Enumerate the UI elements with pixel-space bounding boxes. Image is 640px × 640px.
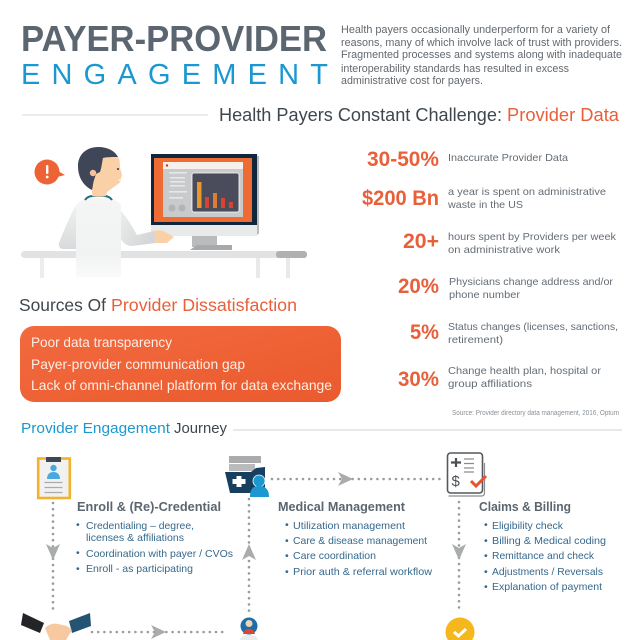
- panel: dissatisfaction reasons: Payer-provider communication gap: [31, 356, 245, 372]
- stat: 30%: [398, 365, 602, 391]
- stat: 30-50%: 30-50%: [367, 148, 439, 171]
- stat: 20%: phone number: [449, 289, 521, 301]
- panel: medical management: Care & disease management: [293, 535, 427, 547]
- heading: provider engagement journey: Journey: [174, 420, 227, 437]
- stat: 30%: Change health plan, hospital or: [448, 365, 602, 377]
- heading: provider data challenge: [22, 105, 620, 125]
- journey flow arrows: [46, 472, 466, 639]
- icon: alert speech bubble: [34, 160, 65, 184]
- icon: medical folder with patient: [225, 456, 269, 497]
- panel: claims and billing: Eligibility check: [492, 520, 564, 532]
- panel: claims and billing: •: [484, 550, 488, 562]
- icon: claims document: [448, 453, 486, 496]
- stat: 20+: on administrative work: [448, 244, 561, 256]
- panel: medical management: Care coordination: [293, 550, 376, 562]
- desk: [21, 251, 307, 278]
- panel: enroll and re-credential: licenses & affiliations: [86, 532, 184, 544]
- stat: $200 Bn: $200 Bn: [362, 187, 439, 210]
- stat: 30%: group affiliations: [448, 378, 532, 390]
- intro text block: reasons, many of which involve lack of trust with providers.: [341, 37, 622, 49]
- intro text block: administrative cost for payers.: [341, 75, 483, 87]
- title: ENGAGEMENT: [21, 59, 328, 91]
- intro text block: [341, 24, 622, 87]
- panel: claims and billing: Remittance and check: [492, 550, 595, 562]
- panel: medical management: Prior auth & referral workflow: [293, 566, 432, 578]
- title: [21, 18, 328, 91]
- stat: 5%: 5%: [410, 321, 439, 344]
- panel: enroll and re-credential: [76, 499, 233, 575]
- panel: dissatisfaction reasons: [20, 326, 341, 402]
- icon: clipboard credential: [38, 457, 70, 498]
- panel: enroll and re-credential: •: [76, 563, 80, 575]
- stat: 20+: hours spent by Providers per week: [448, 231, 617, 243]
- icon: provider avatar: [240, 618, 258, 640]
- source note: Source: Provider directory data management, 2016, Optum: [452, 410, 619, 417]
- stat: 5%: retirement): [448, 334, 503, 346]
- stat: 30%: 30%: [398, 368, 439, 391]
- panel: enroll and re-credential: Coordination with payer / CVOs: [86, 548, 233, 560]
- intro text block: Fragmented processes and systems along with inadequate: [341, 49, 622, 61]
- panel: medical management: •: [285, 519, 289, 531]
- stat: $200 Bn: a year is spent on administrative: [448, 186, 606, 198]
- intro text block: interoperability standards has resulted in excess: [341, 63, 569, 75]
- panel: dissatisfaction reasons: Poor data transparency: [31, 334, 172, 350]
- stat: $200 Bn: waste in the US: [447, 199, 523, 211]
- panel: enroll and re-credential: Credentialing – degree,: [86, 520, 194, 532]
- heading: sources of dissatisfaction: Provider Dissatisfaction: [111, 295, 297, 315]
- panel: claims and billing: Billing & Medical coding: [492, 535, 606, 547]
- icon: handshake: [21, 613, 91, 640]
- computer monitor: [151, 154, 259, 250]
- heading: provider engagement journey: [21, 420, 622, 437]
- stat: 20+: [403, 230, 617, 256]
- panel: claims and billing: Explanation of payment: [492, 581, 602, 593]
- panel: claims and billing: •: [484, 566, 488, 578]
- stat: 30-50%: [367, 148, 568, 171]
- stat: 20%: 20%: [398, 275, 439, 298]
- stat: 20%: [398, 275, 614, 301]
- panel: medical management: Utilization management: [293, 520, 405, 532]
- panel: enroll and re-credential: •: [76, 547, 80, 559]
- stat: 5%: Status changes (licenses, sanctions,: [448, 321, 618, 333]
- intro text block: Health payers occasionally underperform for a variety of: [341, 24, 611, 36]
- title: PAYER-PROVIDER: [21, 18, 327, 59]
- panel: medical management: Medical Management: [278, 499, 406, 514]
- stat: 30-50%: Inaccurate Provider Data: [448, 152, 568, 164]
- doctor: [59, 147, 174, 277]
- panel: medical management: •: [285, 550, 289, 562]
- icon: approval badge: [446, 618, 474, 640]
- panel: medical management: [278, 499, 432, 578]
- stat: $200 Bn: [362, 186, 606, 211]
- panel: enroll and re-credential: Enroll - as participating: [86, 563, 193, 575]
- panel: medical management: •: [285, 566, 289, 578]
- panel: enroll and re-credential: Enroll & (Re)-Credential: [77, 499, 221, 514]
- panel: claims and billing: Adjustments / Reversals: [492, 566, 603, 578]
- illustration: doctor at computer: [21, 147, 307, 278]
- panel: claims and billing: •: [484, 535, 488, 547]
- heading: provider engagement journey: Provider Engagement: [21, 420, 171, 437]
- icon: claims document: $: [452, 473, 460, 490]
- panel: enroll and re-credential: •: [76, 519, 80, 531]
- panel: medical management: •: [285, 535, 289, 547]
- panel: claims and billing: Claims & Billing: [479, 499, 571, 514]
- panel: claims and billing: •: [484, 519, 488, 531]
- stat: 20+: 20+: [403, 230, 439, 253]
- stat: 20%: Physicians change address and/or: [449, 276, 614, 288]
- panel: dissatisfaction reasons: Lack of omni-channel platform for data exchange: [31, 377, 332, 393]
- heading: provider data challenge: Health Payers Constant Challenge:: [219, 105, 502, 125]
- panel: claims and billing: [479, 499, 606, 593]
- heading: sources of dissatisfaction: Sources Of: [19, 295, 106, 315]
- stats list: [362, 148, 619, 417]
- heading: provider data challenge: Provider Data: [507, 105, 620, 125]
- panel: claims and billing: •: [484, 581, 488, 593]
- stat: 5%: [410, 321, 618, 346]
- heading: sources of dissatisfaction: [19, 295, 297, 315]
